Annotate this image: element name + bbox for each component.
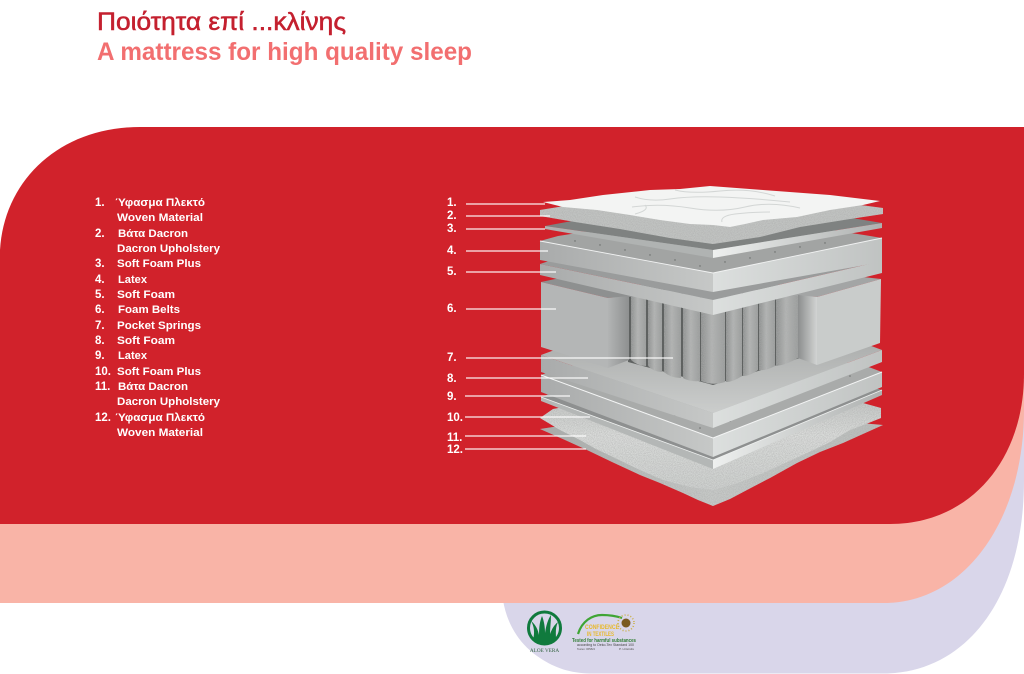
layer 11: bottom dacron wadding xyxy=(540,380,881,490)
legend list of mattress layers: Latex xyxy=(118,274,148,286)
layer 3: soft foam plus xyxy=(545,195,882,258)
legend list of mattress layers: 12. xyxy=(95,412,111,424)
legend list of mattress layers: 9. xyxy=(95,350,105,362)
layer number callouts with leader lines: 4. xyxy=(447,245,457,257)
background: lavender band xyxy=(503,400,1024,674)
layer number callouts with leader lines: 2. xyxy=(447,210,457,222)
legend list of mattress layers: Dacron Upholstery xyxy=(117,243,221,255)
layer number callouts with leader lines: 9. xyxy=(447,391,457,403)
legend list of mattress layers: 11. xyxy=(95,381,110,393)
legend list of mattress layers: 1. xyxy=(95,197,105,209)
heading: Greek: Ποιότητα επί ...κλίνης xyxy=(97,8,346,36)
layer number callouts with leader lines: 3. xyxy=(447,223,457,235)
legend list of mattress layers: Βάτα Dacron xyxy=(118,228,188,240)
layer 4: latex xyxy=(540,212,882,292)
layer number callouts with leader lines: 10. xyxy=(447,412,463,424)
layer 5: soft foam xyxy=(540,235,882,315)
layer 10: soft foam plus xyxy=(541,360,882,469)
legend list of mattress layers xyxy=(95,197,221,439)
legend list of mattress layers: Woven Material xyxy=(117,427,203,439)
legend list of mattress layers: 3. xyxy=(95,258,105,270)
layer number callouts with leader lines: 6. xyxy=(447,303,457,315)
logo: aloe vera: ALOE VERA xyxy=(530,648,559,654)
background: red panel xyxy=(0,127,1024,524)
logo: confidence in textiles: P. Hristidis xyxy=(619,647,635,651)
legend list of mattress layers: Ύφασμα Πλεκτό xyxy=(115,197,205,209)
layer number callouts with leader lines: 5. xyxy=(447,266,457,278)
layer 6: right foam belt xyxy=(785,277,881,365)
layer 12: bottom woven cover xyxy=(540,410,883,506)
title xyxy=(97,8,472,66)
mattress cross-section illustration xyxy=(540,186,883,506)
legend list of mattress layers: Soft Foam Plus xyxy=(117,258,201,270)
legend list of mattress layers: Soft Foam xyxy=(117,289,175,301)
logo: aloe vera xyxy=(528,612,560,654)
logo: confidence in textiles: according to Oeko-Tex Standard 100 xyxy=(577,643,634,647)
background: salmon band xyxy=(0,380,1024,603)
legend list of mattress layers: 10. xyxy=(95,366,111,378)
legend list of mattress layers: 2. xyxy=(95,228,105,240)
logo: confidence in textiles: Tested for harmful substances xyxy=(572,638,636,644)
layer 7: pocket springs xyxy=(628,285,800,385)
legend list of mattress layers: Soft Foam xyxy=(117,335,175,347)
layer 9: latex xyxy=(541,340,882,457)
layer number callouts with leader lines xyxy=(447,197,673,456)
legend list of mattress layers: Βάτα Dacron xyxy=(118,381,188,393)
layer number callouts with leader lines: 11. xyxy=(447,432,462,444)
legend list of mattress layers: 4. xyxy=(95,274,105,286)
layer 6: left foam belt xyxy=(541,278,640,368)
legend list of mattress layers: Soft Foam Plus xyxy=(117,366,201,378)
layer 1: quilted woven cover xyxy=(543,186,880,227)
logo: confidence in textiles: Testex: 065824 xyxy=(577,647,595,651)
legend list of mattress layers: 6. xyxy=(95,304,105,316)
legend list of mattress layers: 5. xyxy=(95,289,105,301)
legend list of mattress layers: Pocket Springs xyxy=(117,320,201,332)
legend list of mattress layers: Dacron Upholstery xyxy=(117,396,221,408)
layer 8: soft foam xyxy=(541,300,882,428)
logo: confidence in textiles: IN TEXTILES xyxy=(587,631,614,638)
legend list of mattress layers: Latex xyxy=(118,350,148,362)
legend list of mattress layers: 8. xyxy=(95,335,105,347)
legend list of mattress layers: Woven Material xyxy=(117,212,203,224)
legend list of mattress layers: Foam Belts xyxy=(118,304,180,316)
layer number callouts with leader lines: 1. xyxy=(447,197,457,209)
layer 2: dacron wadding xyxy=(540,190,883,244)
logo: confidence in textiles xyxy=(572,615,636,651)
layer number callouts with leader lines: 12. xyxy=(447,444,463,456)
heading: English: A mattress for high quality sleep xyxy=(97,38,472,66)
legend list of mattress layers: 7. xyxy=(95,320,105,332)
logo: confidence in textiles: CONFIDENCE xyxy=(585,624,619,631)
legend list of mattress layers: Ύφασμα Πλεκτό xyxy=(115,412,205,424)
layer number callouts with leader lines: 7. xyxy=(447,352,457,364)
layer number callouts with leader lines: 8. xyxy=(447,373,457,385)
